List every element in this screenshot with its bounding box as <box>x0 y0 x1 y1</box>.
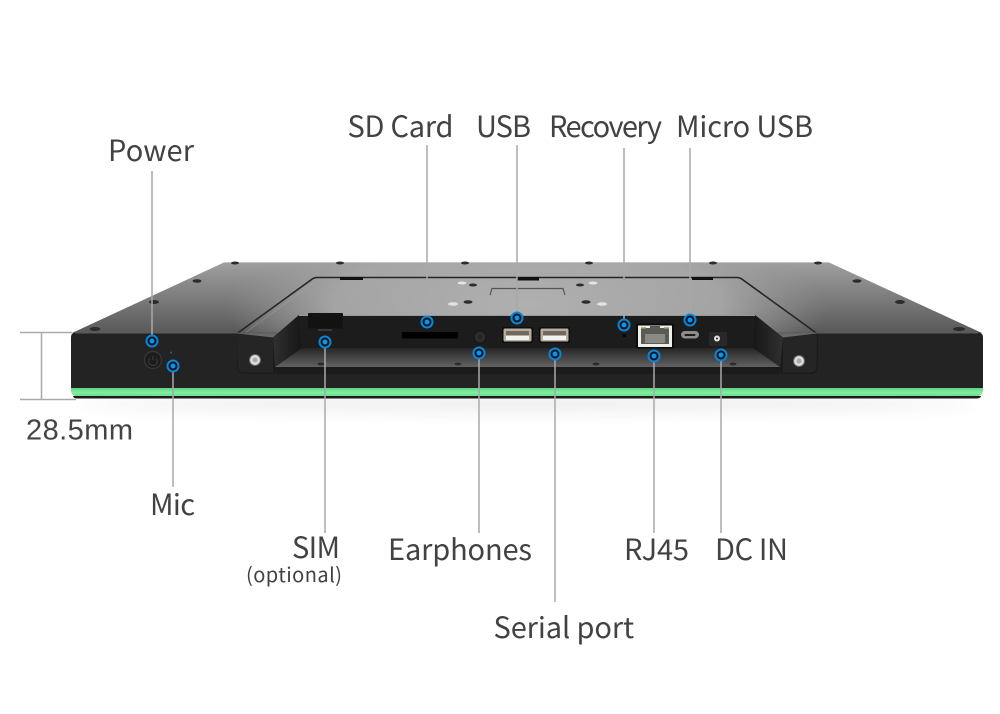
callout: Micro USB <box>676 104 813 326</box>
callout: RJ45: RJ45 <box>624 527 689 569</box>
callout: Serial port <box>494 348 634 647</box>
height value: 28.5mm <box>26 414 133 446</box>
SD card slot <box>402 332 458 338</box>
height dimension <box>20 332 133 446</box>
green light bar <box>71 388 983 396</box>
device: tablet rear view <box>60 260 990 411</box>
callout: SIM <box>246 336 342 588</box>
power button <box>144 352 162 368</box>
callout: Power: Power <box>108 128 195 170</box>
callout: SIM: SIM <box>292 525 340 567</box>
callout: Earphones: Earphones <box>388 527 532 569</box>
earphone jack <box>474 331 486 343</box>
callout: Earphones <box>388 348 532 569</box>
USB port 2 <box>539 327 570 343</box>
RJ45 port <box>636 324 674 348</box>
callout: Mic: Mic <box>150 482 195 524</box>
callout: Micro USB: Micro USB <box>676 104 813 146</box>
callout: SD Card <box>348 104 454 328</box>
mic hole <box>170 352 172 354</box>
front face <box>71 332 983 388</box>
panel screws <box>90 262 965 331</box>
callout: Recovery: Recovery <box>549 104 662 146</box>
callout: DC IN <box>715 350 788 569</box>
DC jack <box>709 332 727 346</box>
callout: SD Card: SD Card <box>348 104 454 146</box>
callout: SIM: (optional) <box>246 559 342 588</box>
callout: USB <box>476 104 531 324</box>
callout: DC IN: DC IN <box>715 527 788 569</box>
tab screw right <box>794 356 804 366</box>
recessed mounting area edges <box>237 277 817 335</box>
USB port 1 <box>502 327 533 343</box>
recess front <box>237 315 818 374</box>
SIM slot <box>308 313 343 330</box>
callout: Serial port: Serial port <box>494 605 634 647</box>
recovery hole <box>623 334 626 337</box>
callout: RJ45 <box>624 350 689 569</box>
tab screw left <box>250 354 260 366</box>
callout: Mic <box>150 360 195 524</box>
callout: Power <box>108 128 195 346</box>
back panel surface <box>60 260 990 335</box>
callout: USB: USB <box>476 104 531 146</box>
callout: Recovery <box>549 104 662 330</box>
micro USB port <box>681 331 699 338</box>
